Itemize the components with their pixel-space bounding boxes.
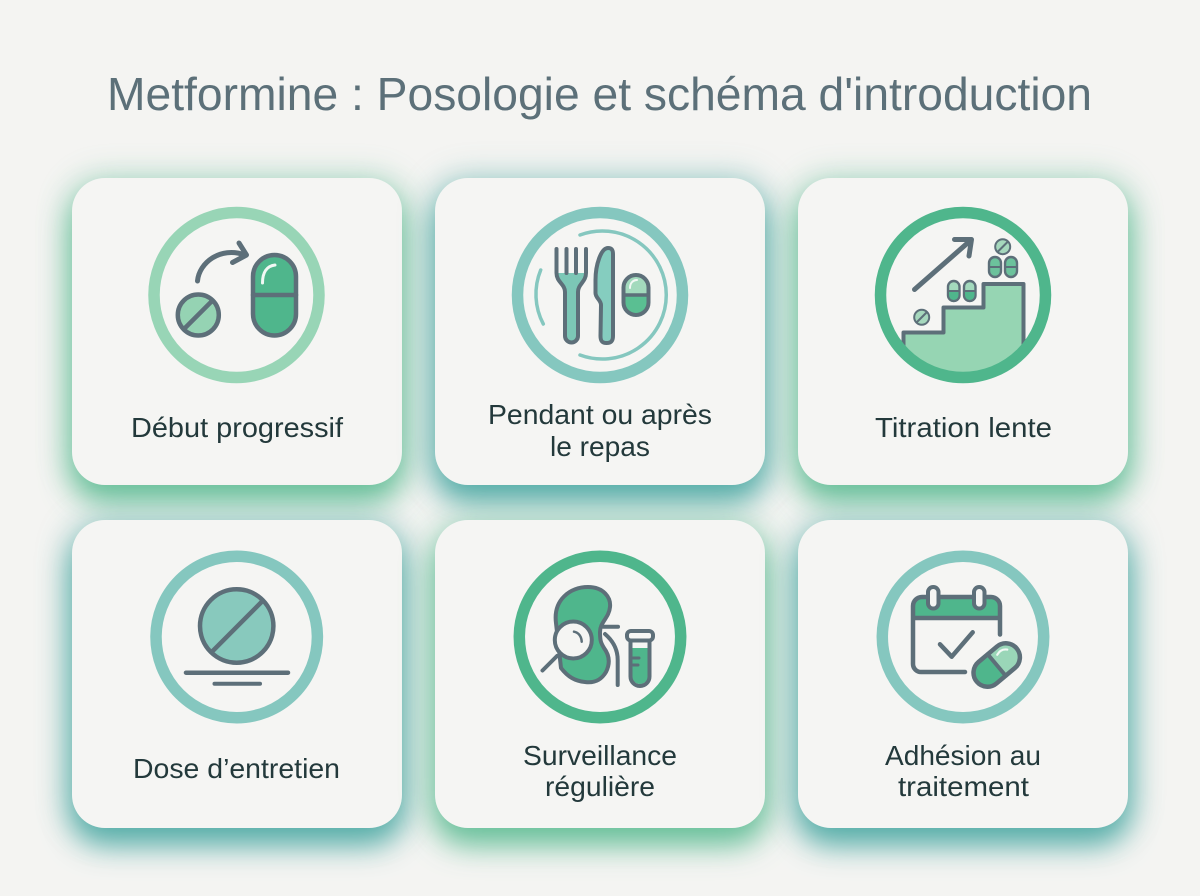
label [523, 740, 677, 802]
icon: capsules step 2 [948, 281, 976, 301]
icon: tablet [200, 589, 273, 663]
icon: calendar [913, 587, 1000, 672]
icon: stairs [904, 284, 1024, 376]
icon: capsule [253, 255, 296, 336]
icon: fork [556, 249, 586, 343]
icon: capsule [968, 638, 1026, 692]
label: Titration lente [875, 412, 1052, 443]
icon: test tube [627, 631, 653, 686]
label: Pendant ou après [488, 399, 712, 430]
icon ring [882, 556, 1044, 718]
label [488, 399, 712, 462]
label: Adhésion au [885, 740, 1041, 771]
label: régulière [545, 771, 655, 802]
label: Dose d’entretien [133, 753, 340, 784]
plate arcs [536, 231, 666, 359]
panel: Surveillance régulière [435, 520, 765, 828]
icon: ureter [603, 627, 618, 685]
icon: pills step 3 [989, 239, 1017, 277]
label: le repas [550, 431, 650, 462]
panel: Pendant ou après le repas [435, 178, 765, 485]
label: traitement [898, 771, 1029, 802]
label [885, 740, 1041, 802]
icon: small capsule [624, 275, 648, 315]
icon ring [156, 556, 317, 718]
icon: base lines [186, 673, 288, 684]
icon: round tablet [178, 294, 219, 336]
icon: curved arrow [198, 243, 246, 281]
panel: Adhésion au traitement [798, 520, 1128, 828]
panel: Titration lente [798, 178, 1128, 485]
icon ring [880, 212, 1046, 378]
icon: kidney [556, 587, 610, 682]
icon: tablet step 1 [914, 310, 929, 325]
icon: magnifier [542, 622, 592, 670]
panel: Début progressif [72, 178, 402, 485]
title: Metformine : Posologie et schéma d'introduction [107, 68, 1092, 120]
label: Début progressif [131, 412, 343, 443]
label: Surveillance [523, 740, 677, 771]
panel: Dose d'entretien [72, 520, 402, 828]
icon ring [518, 212, 682, 378]
icon ring [154, 212, 319, 378]
icon: rising arrow [914, 240, 972, 290]
icon ring [519, 556, 681, 718]
icon: knife [596, 248, 613, 343]
